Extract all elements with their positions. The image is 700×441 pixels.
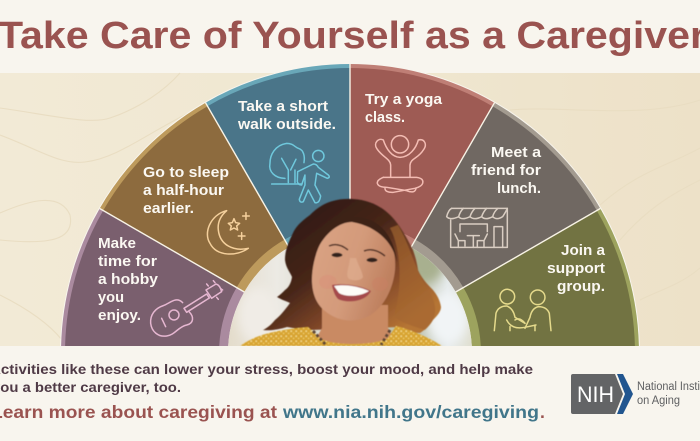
segment: hobby — [61, 208, 244, 346]
title: Take Care of Yourself as a Caregiver — [0, 15, 700, 57]
label: hobby: time for — [98, 253, 157, 270]
label: hobby: enjoy. — [98, 307, 141, 324]
label: sleep: Go to sleep — [143, 164, 229, 181]
label: hobby: a hobby — [98, 271, 159, 288]
label: hobby — [98, 235, 159, 324]
label: yoga: Try a yoga — [365, 91, 443, 108]
label: yoga — [365, 91, 443, 126]
textured background band — [0, 73, 700, 346]
NIH logo: NIH — [577, 382, 614, 407]
icon: two people holding hands — [494, 289, 551, 331]
footer panel — [0, 346, 700, 441]
icon: cafe storefront — [447, 208, 507, 247]
call to action: . — [540, 402, 545, 422]
icon: person walking by tree — [270, 143, 329, 203]
wheel outer edge — [60, 63, 640, 346]
label: support group: support — [547, 260, 605, 277]
segment: support group — [456, 208, 639, 346]
label: sleep — [143, 164, 229, 217]
label: friend: lunch. — [497, 180, 541, 197]
label: support group — [547, 242, 606, 295]
label: walk: walk outside. — [237, 116, 336, 133]
semicircle wheel of activities — [60, 63, 640, 346]
photo background — [228, 248, 472, 346]
label: sleep: earlier. — [143, 200, 194, 217]
photo: smiling woman — [228, 199, 472, 346]
label: yoga: class. — [365, 109, 405, 126]
person — [240, 199, 442, 346]
label: walk: Take a short — [238, 98, 328, 115]
supporting text — [0, 361, 533, 395]
segment: yoga — [350, 64, 494, 247]
label: hobby: you — [98, 289, 124, 306]
icon: guitar — [151, 281, 223, 336]
label: friend: Meet a — [491, 144, 542, 161]
icon: yoga pose — [376, 136, 425, 192]
segment: friend — [411, 103, 600, 292]
segment: walk — [206, 64, 350, 247]
label: hobby: Make — [98, 235, 136, 252]
supporting text: Activities like these can lower your stress, boost your mood, and help make — [0, 361, 533, 377]
NIH logo: on Aging — [637, 395, 680, 407]
label: sleep: a half-hour — [143, 182, 224, 199]
call to action — [0, 402, 545, 422]
label: friend: friend for — [471, 162, 541, 179]
call to action: www.nia.nih.gov/caregiving — [282, 402, 539, 422]
label: walk — [237, 98, 336, 133]
label: support group: Join a — [561, 242, 606, 259]
icon: moon and stars — [207, 211, 249, 254]
label: support group: group. — [557, 278, 605, 295]
NIH logo — [571, 374, 700, 414]
label: friend — [471, 144, 542, 197]
segment: sleep — [100, 103, 289, 292]
